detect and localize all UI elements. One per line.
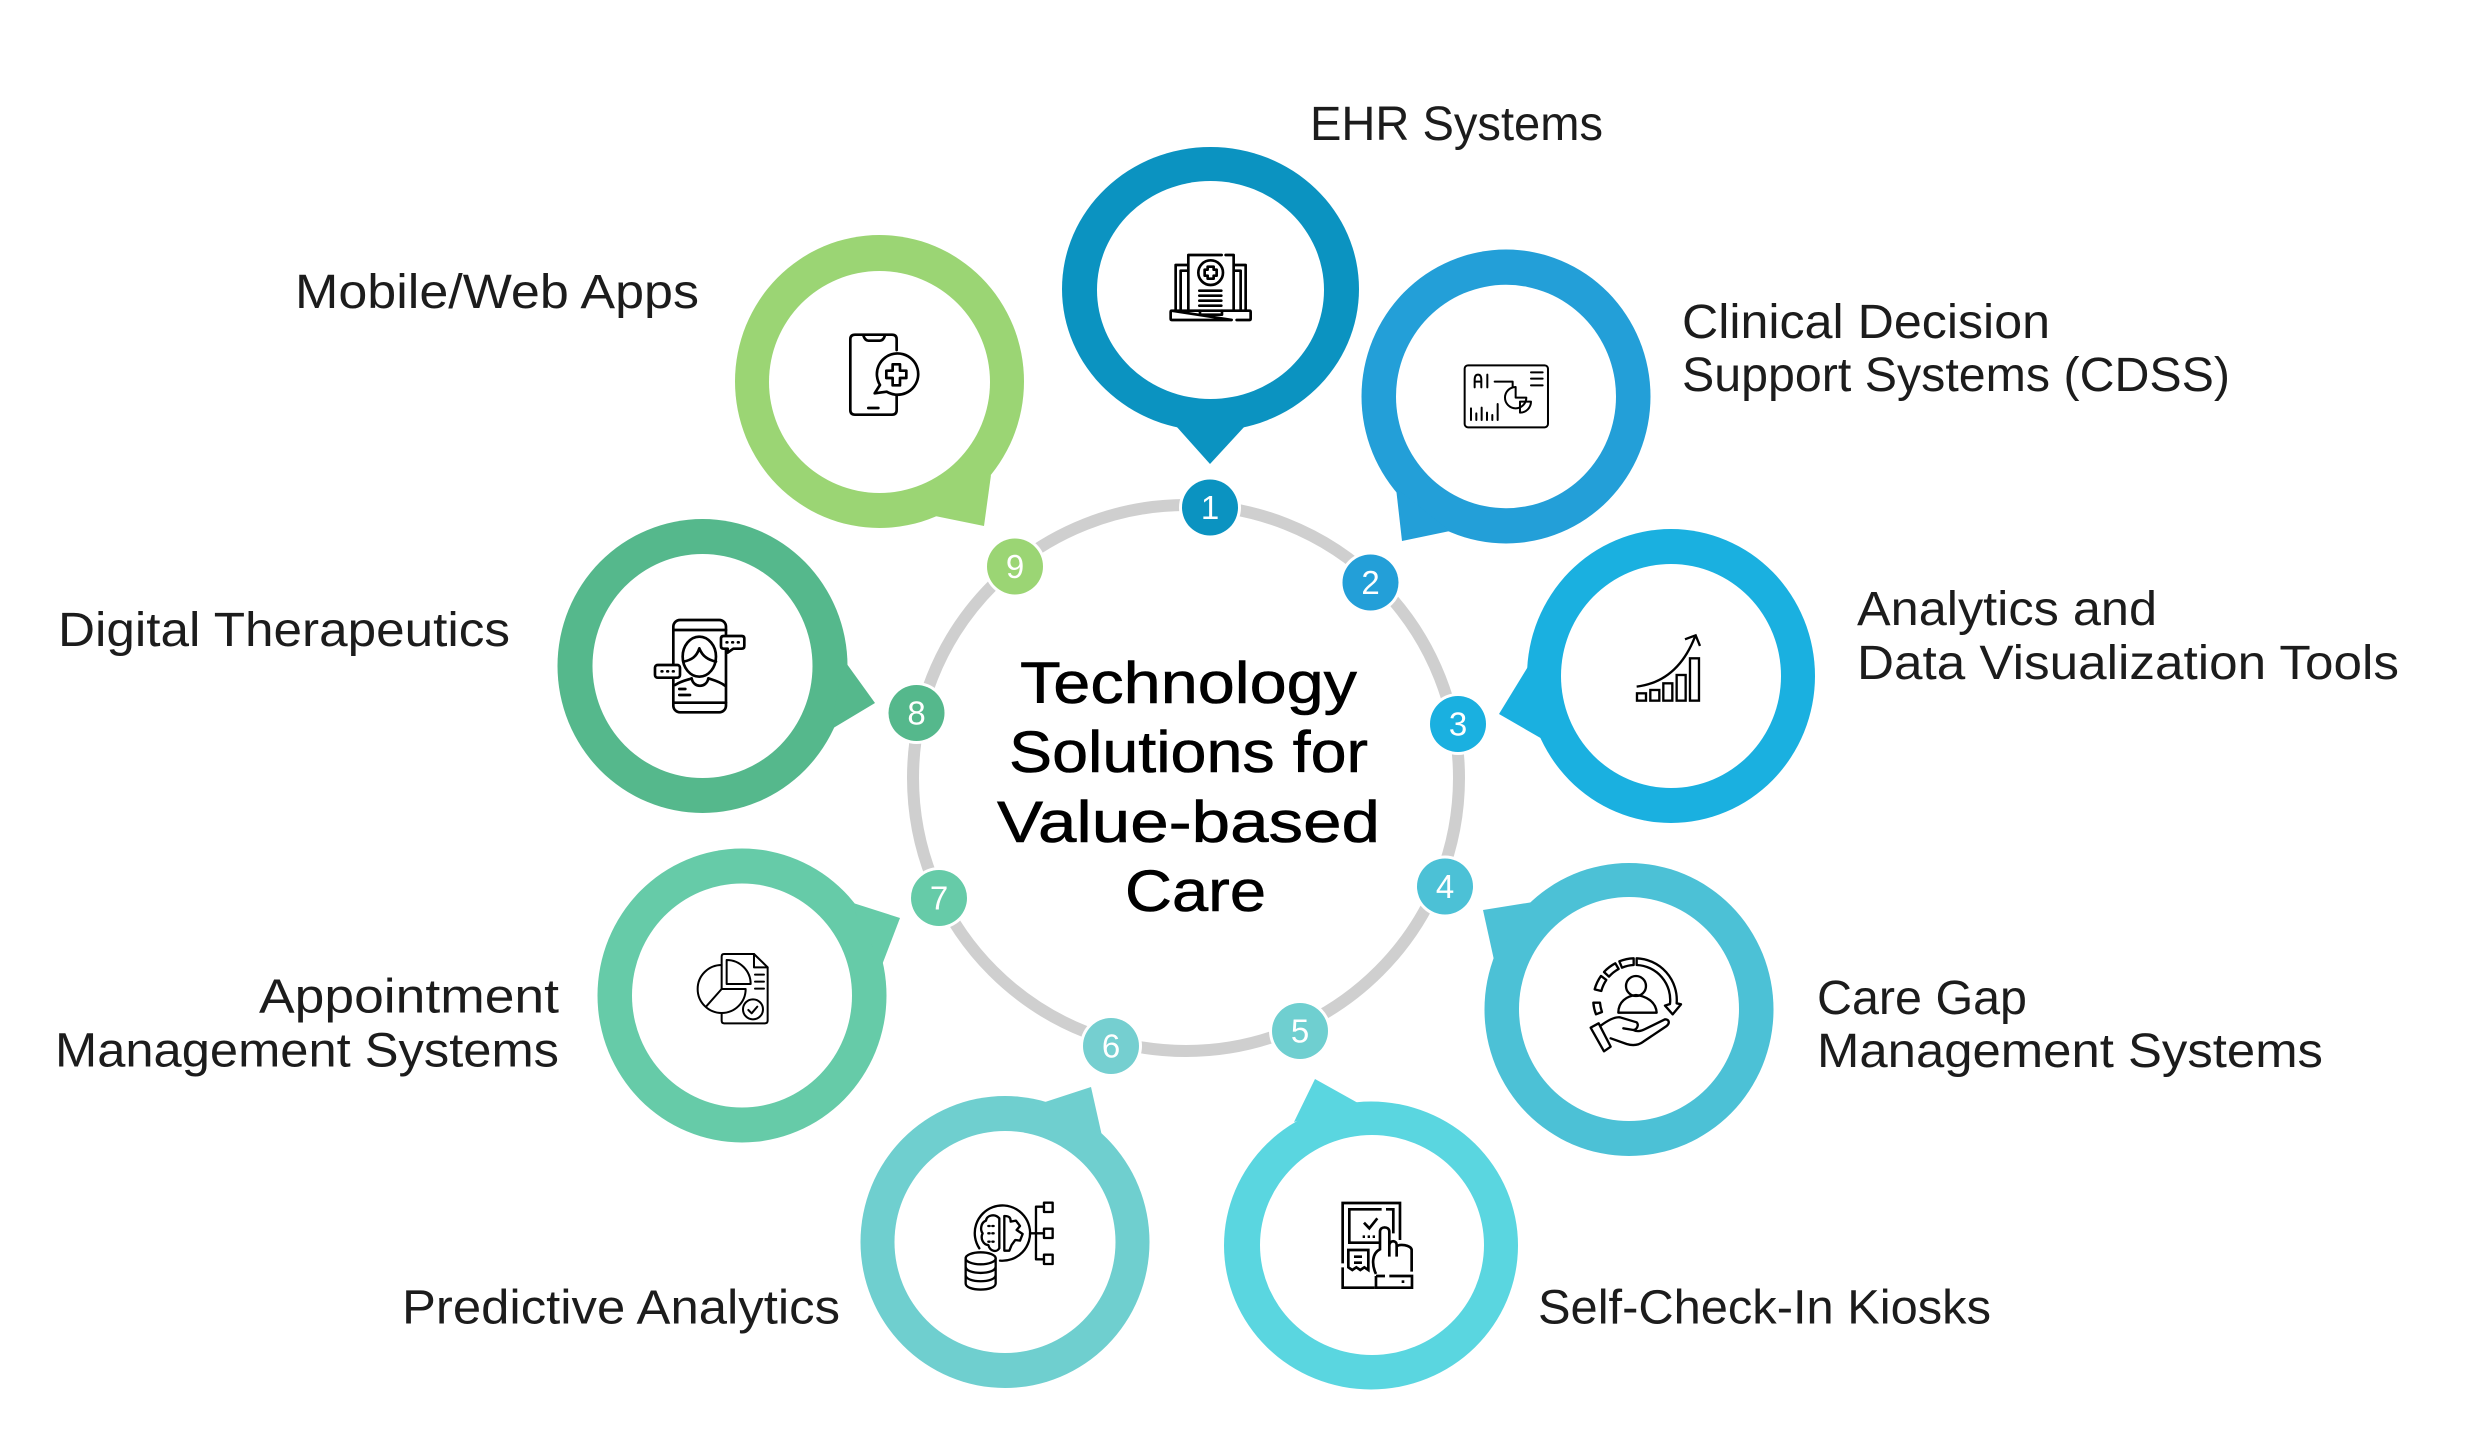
label: Clinical Decision Support Systems (CDSS): Clinical Decision [1682,296,2050,349]
bubble 7 [598,848,900,1142]
number badge 9: 9 [1006,548,1024,585]
bubble 2 [1362,250,1650,544]
panel: Care Gap Management Systems [1414,856,2323,1156]
number badge 4 [1414,856,1476,918]
number badge 6 [1080,1015,1142,1077]
icon: brain, gear and database [966,1203,1053,1290]
panel: Digital Therapeutics [58,519,948,813]
number badge 7: 7 [930,880,948,916]
number badge 1: 1 [1201,489,1219,526]
icon: phone with medical chat [850,335,918,415]
number badge 3: 3 [1449,706,1467,742]
number badge 1 [1179,476,1241,538]
label: EHR Systems: EHR Systems [1310,98,1603,151]
label: Analytics and Data Visualization Tools [1857,583,2399,690]
bubble 3 [1499,529,1815,823]
central ring [913,505,1459,1051]
label: Appointment Management Systems: Management Systems [55,1024,559,1078]
bubble 4 [1483,863,1774,1156]
bubble 5 [1224,1079,1518,1390]
icon: hand holding patient [1591,958,1681,1051]
label: Care Gap Management Systems: Management Systems [1817,1025,2323,1078]
label: Care Gap Management Systems [1817,972,2323,1078]
icon: kiosk with hand [1343,1203,1412,1288]
title: Technology [1020,651,1357,716]
label: Appointment Management Systems: Appointment [259,970,559,1024]
icon: AI dashboard [1465,365,1548,427]
number badge 2: 2 [1361,564,1380,601]
label: Self-Check-In Kiosks: Self-Check-In Kiosks [1538,1282,1991,1334]
bubble 8 [558,519,875,813]
number badge 7 [908,867,970,929]
panel: Self-Check-In Kiosks [1224,1000,1991,1390]
title: Solutions for [1009,720,1368,785]
panel: Predictive Analytics [402,1015,1150,1388]
icon: phone with video consult [655,620,744,712]
number badge 5: 5 [1291,1012,1309,1050]
panel: Analytics and Data Visualization Tools [1427,529,2399,823]
number badge 3 [1427,693,1489,755]
title [997,651,1380,924]
icon: laptop with medical record [1171,255,1251,320]
title: Value-based [997,790,1380,855]
bubble 1 [1062,147,1359,464]
label: Analytics and Data Visualization Tools: Data Visualization Tools [1857,637,2399,690]
icon: growth chart [1637,635,1700,701]
label: Digital Therapeutics: Digital Therapeutics [58,604,510,657]
bubble 9 [735,235,1024,528]
number badge 5 [1269,1000,1331,1062]
label: Analytics and Data Visualization Tools: Analytics and [1857,583,2157,636]
number badge 6: 6 [1102,1028,1120,1064]
number badge 4: 4 [1436,868,1454,905]
number badge 8 [886,682,948,744]
panel: Clinical Decision Support Systems [1340,250,2230,614]
number badge 9 [984,536,1046,598]
panel: EHR Systems [1062,98,1603,538]
panel: Mobile/Web Apps [295,235,1046,598]
label: Care Gap Management Systems: Care Gap [1817,972,2027,1025]
title: Care [1125,859,1266,924]
bubble 6 [860,1087,1150,1388]
label: Appointment Management Systems [55,970,559,1078]
label: Mobile/Web Apps: Mobile/Web Apps [295,266,699,319]
number badge 2 [1340,552,1402,614]
label: Clinical Decision Support Systems (CDSS): Support Systems (CDSS) [1682,349,2230,402]
label: Predictive Analytics: Predictive Analytics [402,1282,840,1334]
label: Clinical Decision Support Systems (CDSS) [1682,296,2230,402]
icon: report with pie chart [698,954,768,1023]
number badge 8: 8 [907,694,926,732]
panel: Appointment Management Systems [55,848,970,1142]
